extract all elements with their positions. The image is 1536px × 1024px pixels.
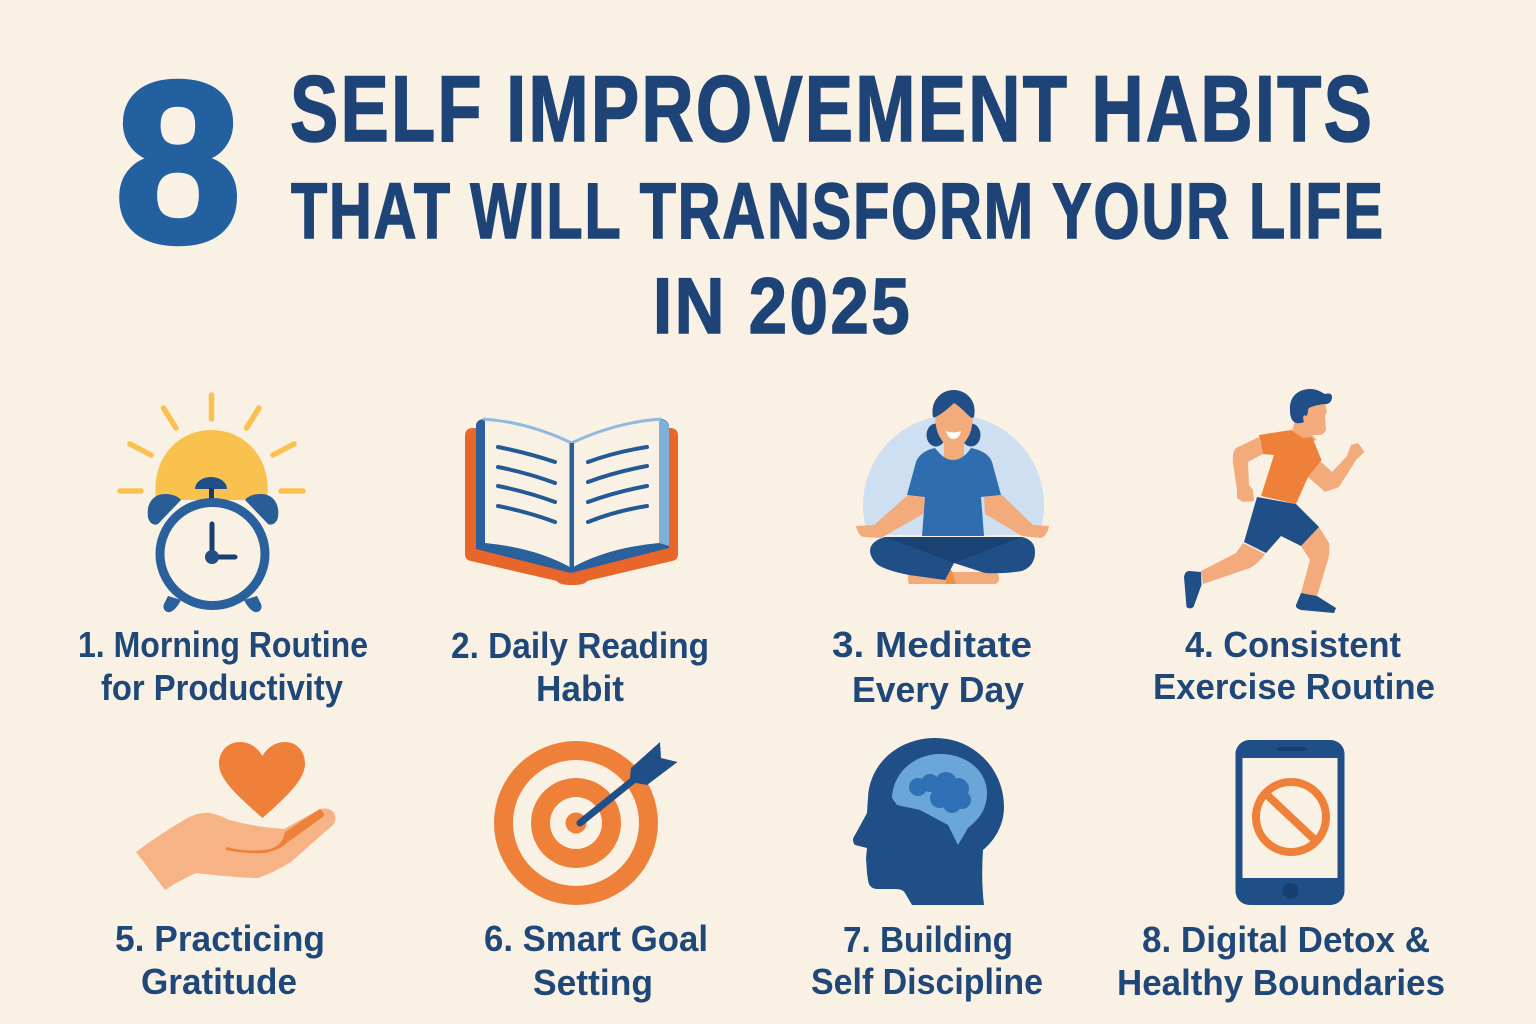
label 6 line 2: Setting	[533, 962, 653, 1003]
label 5 line 2: Gratitude	[141, 961, 297, 1002]
icon: open book	[465, 419, 678, 585]
label 6: 6. Smart Goal	[484, 918, 708, 959]
label 3 line 2: Every Day	[852, 669, 1024, 710]
label 3: 3. Meditate	[832, 624, 1032, 665]
label 2: 2. Daily Reading	[451, 625, 709, 666]
icon: meditating person	[856, 390, 1049, 584]
label 2 line 2: Habit	[536, 668, 624, 709]
title line 2: THAT WILL TRANSFORM YOUR LIFE	[291, 167, 1383, 255]
label 1 line 2: for Productivity	[101, 667, 343, 708]
label 7 line 2: Self Discipline	[811, 961, 1043, 1002]
label 7: 7. Building	[843, 919, 1013, 960]
icon: running person	[1184, 389, 1364, 613]
label 4 line 2: Exercise Routine	[1153, 666, 1435, 707]
label 5: 5. Practicing	[115, 918, 325, 959]
title block	[115, 36, 1383, 350]
icon: head with brain	[853, 738, 1004, 905]
icon: target and arrow	[494, 741, 678, 905]
label 1: 1. Morning Routine	[78, 624, 368, 665]
label 8 line 2: Healthy Boundaries	[1117, 962, 1445, 1003]
big number 8: 8	[115, 36, 241, 290]
title line 1: SELF IMPROVEMENT HABITS	[290, 56, 1372, 161]
icon: heart in hand	[136, 742, 336, 890]
icon: phone with no sign	[1236, 740, 1344, 905]
icon: sun and alarm clock	[120, 395, 303, 612]
label 8: 8. Digital Detox &	[1142, 919, 1430, 960]
title line 3: IN 2025	[653, 262, 910, 350]
label 4: 4. Consistent	[1185, 624, 1401, 665]
